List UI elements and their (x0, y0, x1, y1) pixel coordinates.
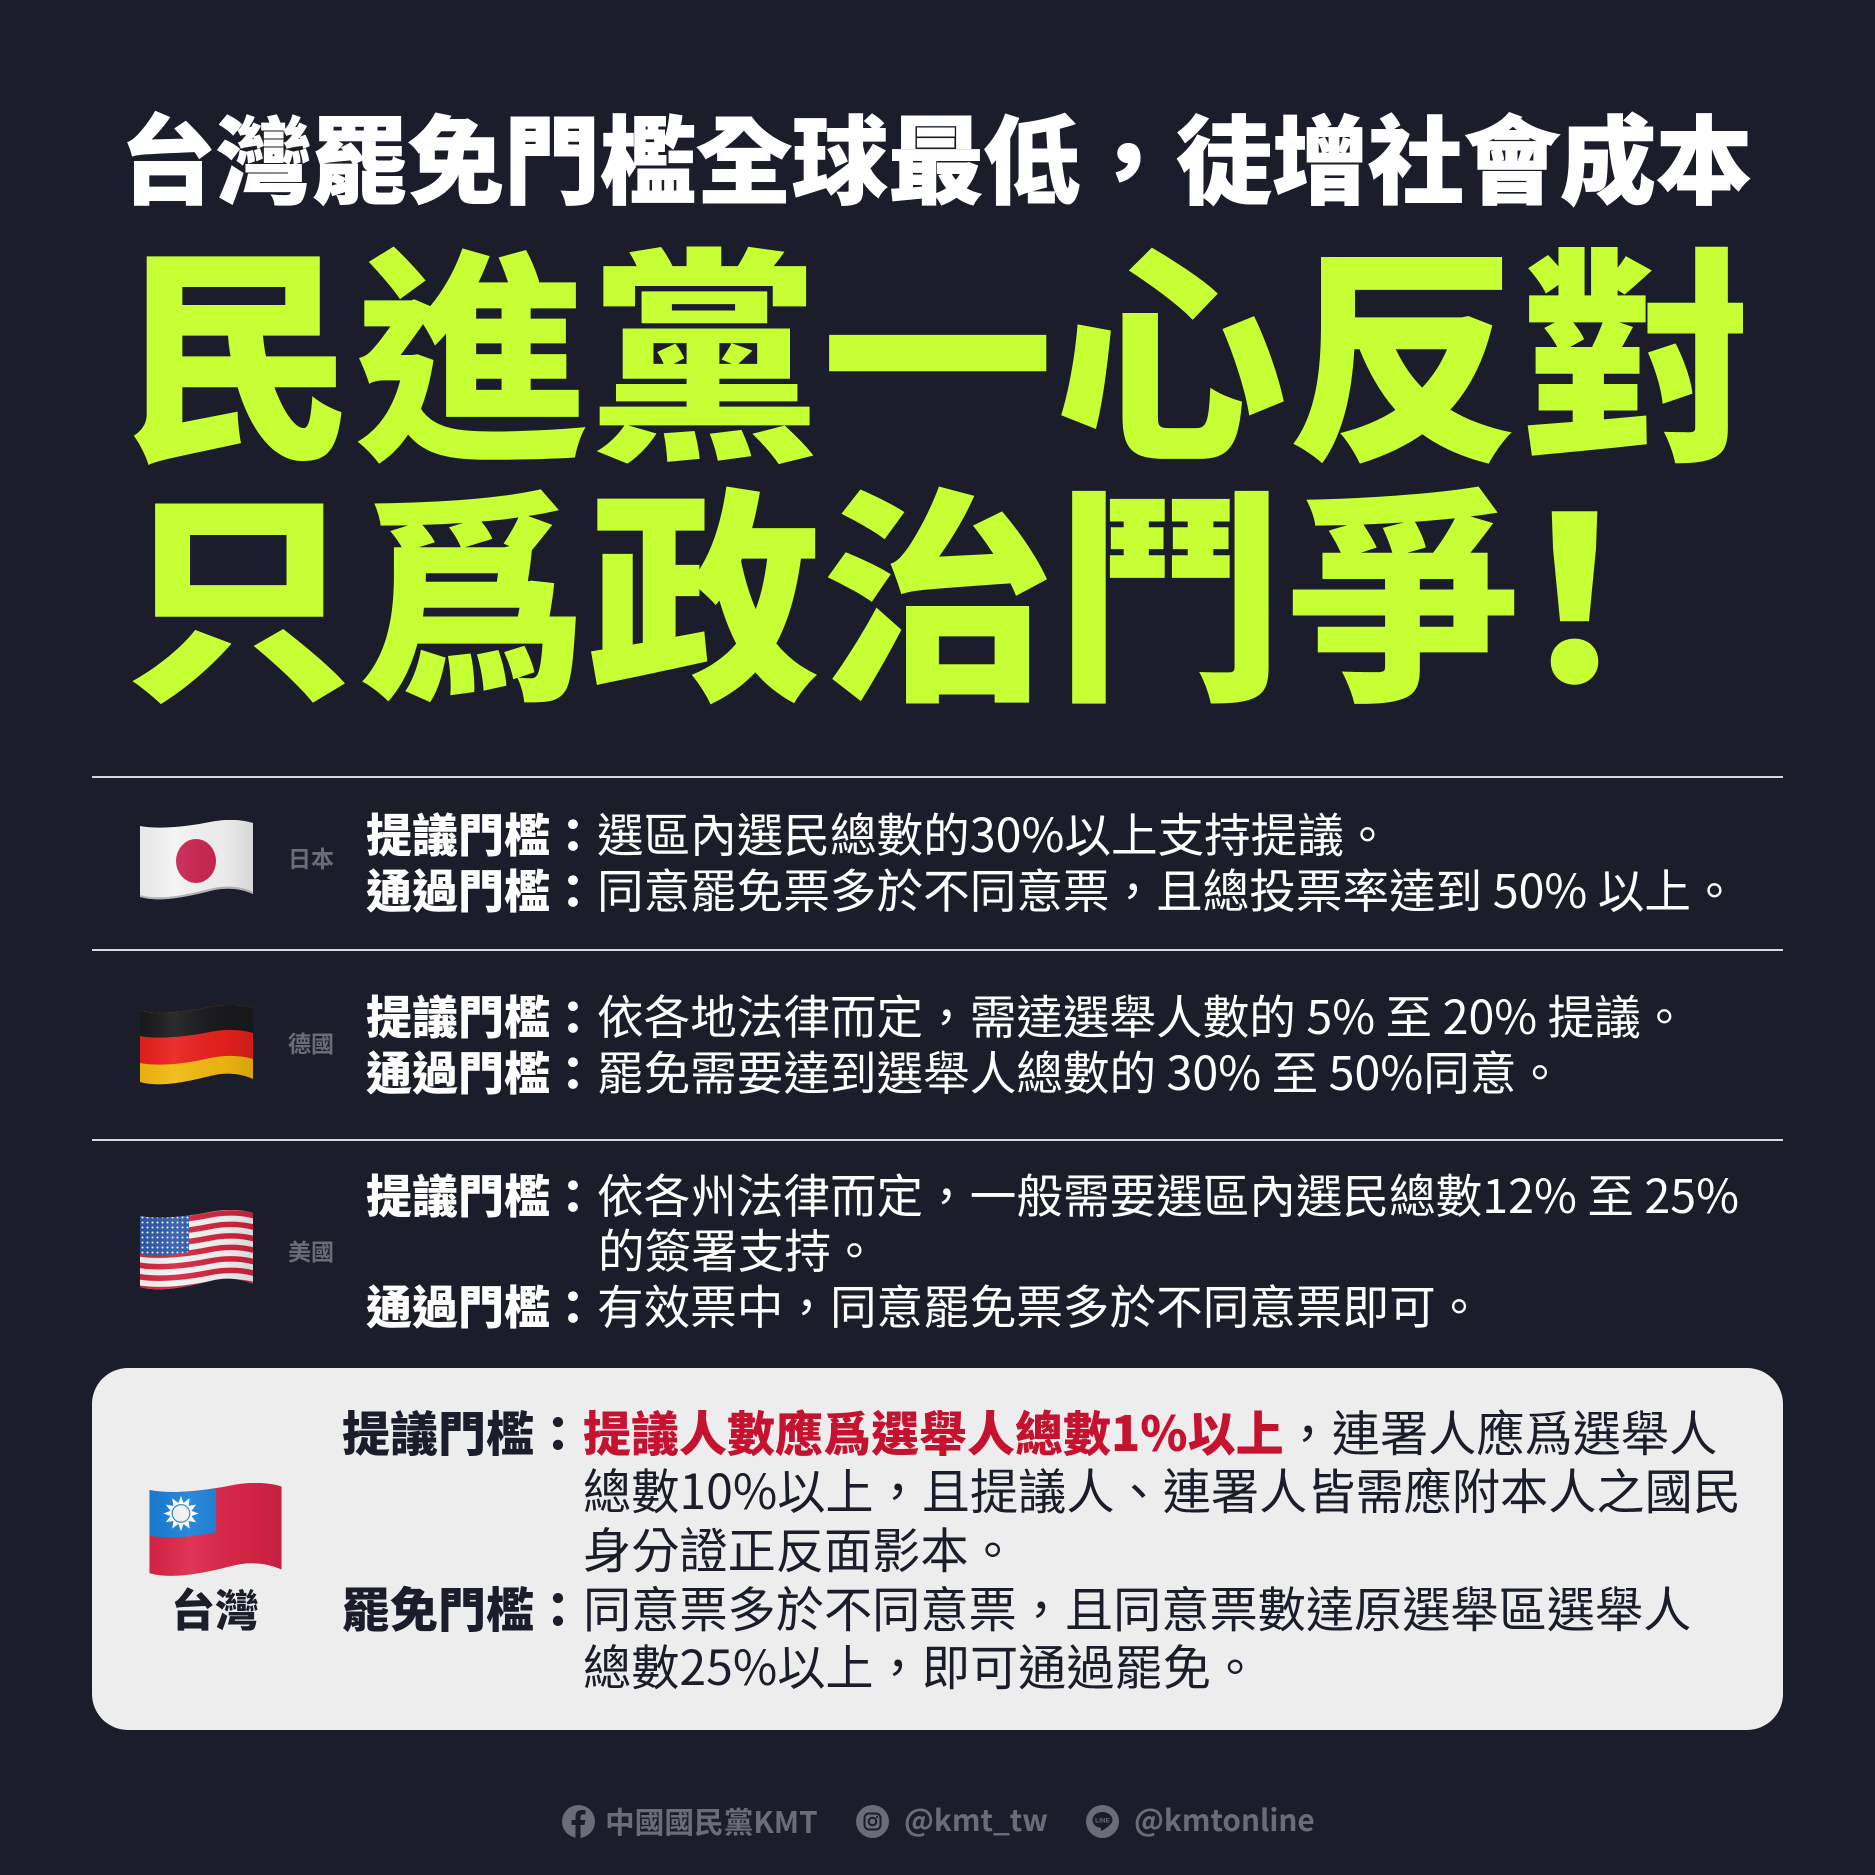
panel: United States (140, 1160, 1739, 1338)
text: Japan passing threshold: 通過門檻：同意罷免票多於不同意票，且總投票率達到 50% 以上。 (366, 855, 1738, 922)
footer: social links (562, 1797, 1315, 1842)
text: recall line 1: 罷免門檻：同意票多於不同意票，且同意票數達原選舉區選舉人 (342, 1571, 1691, 1641)
icon: US flag (140, 1210, 253, 1290)
text: US proposal threshold: 提議門檻：依各州法律而定，一般需要選區內選民總數12% 至 25% (366, 1160, 1739, 1227)
icon: Germany flag (140, 1005, 253, 1084)
text: US proposal threshold continued: 的簽署支持。 (598, 1215, 878, 1282)
panel: Taiwan (92, 1368, 1783, 1730)
label: United States: 美國 (288, 1233, 334, 1267)
label: Japan: 日本 (288, 840, 334, 874)
text: Taiwan proposal threshold (342, 1395, 1741, 1582)
text: recall line 2: 總數25%以上，即可通過罷免。 (583, 1629, 1259, 1699)
text: Taiwan recall threshold (342, 1571, 1691, 1699)
icon: facebook (562, 1805, 595, 1838)
text: proposal line 2: 總數10%以上，且提議人、連署人皆需應附本人之國民 (583, 1453, 1741, 1523)
label: Taiwan: 台灣 (171, 1575, 259, 1639)
icon: instagram (856, 1805, 889, 1838)
icon: line (1086, 1805, 1119, 1838)
title: 台灣罷免門檻全球最低，徒增社會成本 (120, 85, 1752, 224)
panel: Japan (140, 799, 1738, 922)
text: facebook name: 中國國民黨KMT (605, 1799, 818, 1842)
icon: Japan flag (140, 820, 253, 900)
icon: line: LINE (1095, 1818, 1111, 1825)
headline line 1: 民進黨一心反對 (122, 178, 1753, 509)
text: Germany passing threshold: 通過門檻：罷免需要達到選舉人總數的 30% 至 50%同意。 (366, 1037, 1563, 1104)
text: US passing threshold: 通過門檻：有效票中，同意罷免票多於不同意票即可。 (366, 1271, 1482, 1338)
text: instagram handle: @kmt_tw (904, 1797, 1048, 1840)
text: line handle: @kmtonline (1134, 1797, 1315, 1840)
icon: Taiwan flag (150, 1483, 282, 1576)
label: Germany: 德國 (288, 1025, 334, 1059)
text: proposal line 1: 提議門檻：提議人數應爲選舉人總數1%以上，連署人應爲選舉人 (342, 1395, 1717, 1465)
panel: Germany (140, 981, 1687, 1104)
text: Japan proposal threshold: 提議門檻：選區內選民總數的30%以上支持提議。 (366, 799, 1391, 866)
text: Germany proposal threshold: 提議門檻：依各地法律而定，需達選舉人數的 5% 至 20% 提議。 (366, 981, 1687, 1048)
headline line 2: 只爲政治鬥爭！ (122, 418, 1691, 749)
text: proposal line 3: 身分證正反面影本。 (583, 1512, 1017, 1582)
